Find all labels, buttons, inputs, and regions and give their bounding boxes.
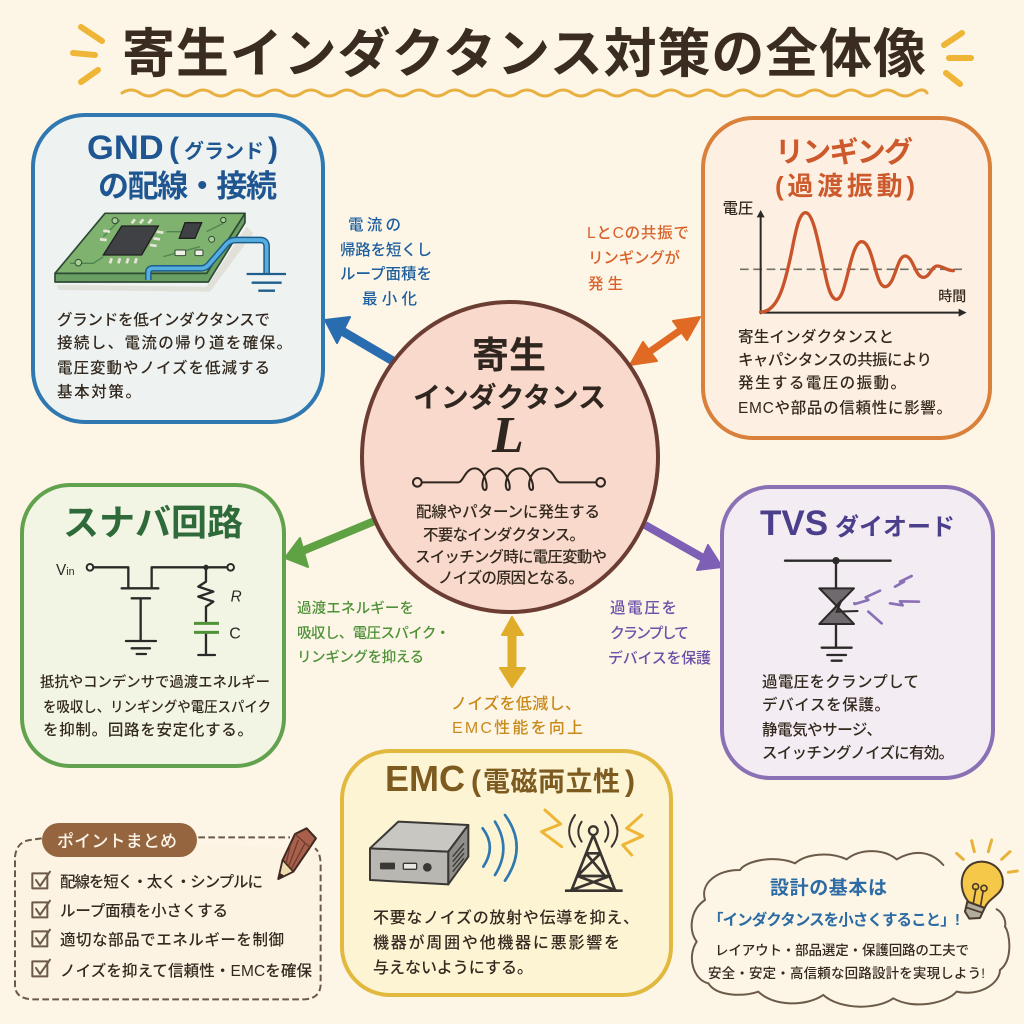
label: EMC arrow: EMC性能を向上: [452, 719, 583, 737]
heading: EMC: EMC: [385, 758, 465, 799]
label: ringing arrow: [587, 224, 689, 293]
label: GND arrow: [340, 216, 432, 308]
icon: snubber schematic: [56, 562, 242, 655]
heading: parasitic inductance: 寄生: [472, 335, 546, 376]
heading: GND: [87, 129, 278, 204]
text: ringing description: キャパシタンスの共振により: [738, 351, 932, 369]
panel: EMC: [342, 751, 671, 995]
text: TVS description: 静電気やサージ、: [762, 721, 882, 739]
icon: light bulb: [957, 840, 1017, 919]
text: EMC description: 機器が周囲や他機器に悪影響を: [373, 933, 620, 952]
label: snubber arrow: リンギングを抑える: [297, 649, 424, 666]
heading: GND: の配線・接続: [98, 169, 277, 204]
text: GND description: 基本対策。: [57, 383, 141, 401]
text: design basics description: レイアウト・部品選定・保護回路の工夫で: [715, 943, 969, 958]
icon: TVS diode schematic: [785, 557, 919, 661]
label: EMC arrow: ノイズを低減し、: [451, 694, 581, 713]
label: ringing arrow: リンギングが: [588, 248, 680, 267]
text: central description: ノイズの原因となる。: [438, 568, 584, 587]
arrow: centre to TVS: [645, 525, 722, 570]
label: TVS arrow: [608, 599, 711, 667]
text: snubber description: を吸収し、リンギングや電圧スパイク: [43, 699, 271, 716]
label: GND arrow: 帰路を短くし: [340, 241, 432, 259]
text: EMC description: [373, 908, 639, 977]
label: snubber arrow: 吸収し、電圧スパイク・: [297, 625, 450, 642]
icon: circuit board with ground: [55, 213, 286, 292]
text: GND description: 電圧変動やノイズを低減する: [57, 358, 270, 377]
icon: pencil: [278, 828, 316, 879]
icon: snubber schematic: R: [231, 589, 242, 606]
checklist text: [60, 873, 312, 980]
heading: GND: グランド: [184, 139, 264, 163]
panel: ringing: [703, 118, 990, 438]
heading: TVS: ダイオード: [835, 513, 955, 541]
label: ringing arrow: 発生: [588, 275, 623, 293]
title: 寄生インダクタンス対策の全体像: [122, 25, 926, 84]
checklist text: 適切な部品でエネルギーを制御: [60, 931, 284, 949]
checklist text: ノイズを抑えて信頼性・EMCを確保: [60, 961, 312, 980]
heading: parasitic inductance: インダクタンス: [413, 381, 606, 413]
label: GND arrow: 電流の: [348, 216, 401, 234]
arrow: centre to GND: [325, 317, 393, 361]
text: GND description: グランドを低インダクタンスで: [57, 310, 270, 329]
checklist icons: [32, 872, 50, 976]
arrow: centre to ringing: [630, 317, 700, 365]
label: GND arrow: ループ面積を: [340, 265, 432, 283]
label: EMC arrow: [451, 694, 583, 737]
heading: EMC: (: [471, 765, 481, 798]
heading: design basics: 設計の基本は: [770, 876, 887, 899]
text: GND description: [57, 310, 292, 401]
chart: voltage ringing waveform: [723, 200, 967, 317]
text: central description: 配線やパターンに発生する: [416, 503, 600, 521]
text: ringing description: EMCや部品の信頼性に影響。: [738, 398, 952, 417]
text: TVS description: 過電圧をクランプして: [762, 673, 919, 691]
text: central description: スイッチング時に電圧変動や: [415, 548, 607, 566]
chart: voltage ringing waveform: 電圧: [723, 200, 753, 217]
text: ringing description: [738, 327, 952, 417]
text: snubber description: [40, 673, 271, 739]
heading: design basics: [708, 876, 960, 929]
panel: key points: [15, 823, 321, 999]
icon: inductor symbol: [413, 468, 605, 490]
heading: parasitic inductance: [413, 335, 606, 413]
heading: EMC: 電磁両立性: [483, 767, 620, 797]
checklist text: 配線を短く・太く・シンプルに: [60, 873, 263, 891]
label: TVS arrow: デバイスを保護: [608, 649, 711, 667]
heading: design basics: 「インダクタンスを小さくすること」!: [708, 910, 960, 929]
heading: ringing: [775, 136, 915, 201]
text: EMC description: 与えないようにする。: [373, 959, 533, 977]
label: snubber arrow: [297, 600, 450, 666]
heading: GND: GND: [87, 129, 164, 167]
label: GND arrow: 最小化: [362, 290, 417, 308]
text: TVS description: [762, 673, 954, 762]
arrow: centre to snubber: [285, 520, 377, 567]
text: design basics description: [708, 943, 985, 981]
icon: device emitting waves and radio tower: [370, 810, 643, 891]
text: snubber description: 抵抗やコンデンサで過渡エネルギー: [40, 673, 270, 691]
icon: snubber schematic: Vin: [56, 562, 75, 579]
text: TVS description: デバイスを保護。: [762, 695, 890, 714]
text: EMC description: 不要なノイズの放射や伝導を抑え、: [373, 908, 639, 927]
text: central description: [415, 503, 607, 587]
heading: EMC: ): [625, 765, 635, 798]
chart: voltage ringing waveform: 時間: [938, 288, 966, 304]
text: central description: 不要なインダクタンス。: [423, 525, 585, 544]
text: ringing description: 発生する電圧の振動。: [738, 374, 906, 392]
heading pill: key points: [42, 823, 197, 857]
arrow: centre to EMC: [500, 617, 525, 687]
heading: TVS: TVS: [760, 504, 828, 543]
heading pill: key points: ポイントまとめ: [57, 832, 177, 851]
label: TVS arrow: 過電圧を: [610, 599, 677, 617]
panel: central parasitic inductance circle: [362, 302, 658, 612]
label: TVS arrow: クランプして: [610, 625, 689, 642]
text: design basics description: 安全・安定・高信頼な回路設計を実現しよう!: [708, 965, 985, 981]
text: snubber description: を抑制。回路を安定化する。: [43, 721, 253, 739]
label: ringing arrow: LとCの共振で: [587, 224, 689, 242]
heading: GND: ): [268, 132, 278, 165]
heading: ringing: (過渡振動): [775, 171, 915, 201]
text: TVS description: スイッチングノイズに有効。: [762, 743, 954, 762]
panel: TVS diode: [722, 487, 993, 778]
checklist text: ループ面積を小さくする: [60, 902, 228, 920]
symbol: L: L: [491, 407, 524, 464]
heading: snubber: スナバ回路: [63, 502, 243, 543]
text: GND description: 接続し、電流の帰り道を確保。: [57, 334, 292, 352]
callout: design basics cloud: [692, 840, 1017, 1007]
panel: snubber circuit: [22, 485, 284, 766]
heading: ringing: リンギング: [775, 136, 913, 169]
icon: snubber schematic: C: [229, 625, 241, 642]
heading: GND: (: [169, 132, 179, 165]
label: snubber arrow: 過渡エネルギーを: [297, 600, 414, 617]
panel: GND wiring: [33, 115, 323, 422]
text: ringing description: 寄生インダクタンスと: [738, 327, 894, 346]
